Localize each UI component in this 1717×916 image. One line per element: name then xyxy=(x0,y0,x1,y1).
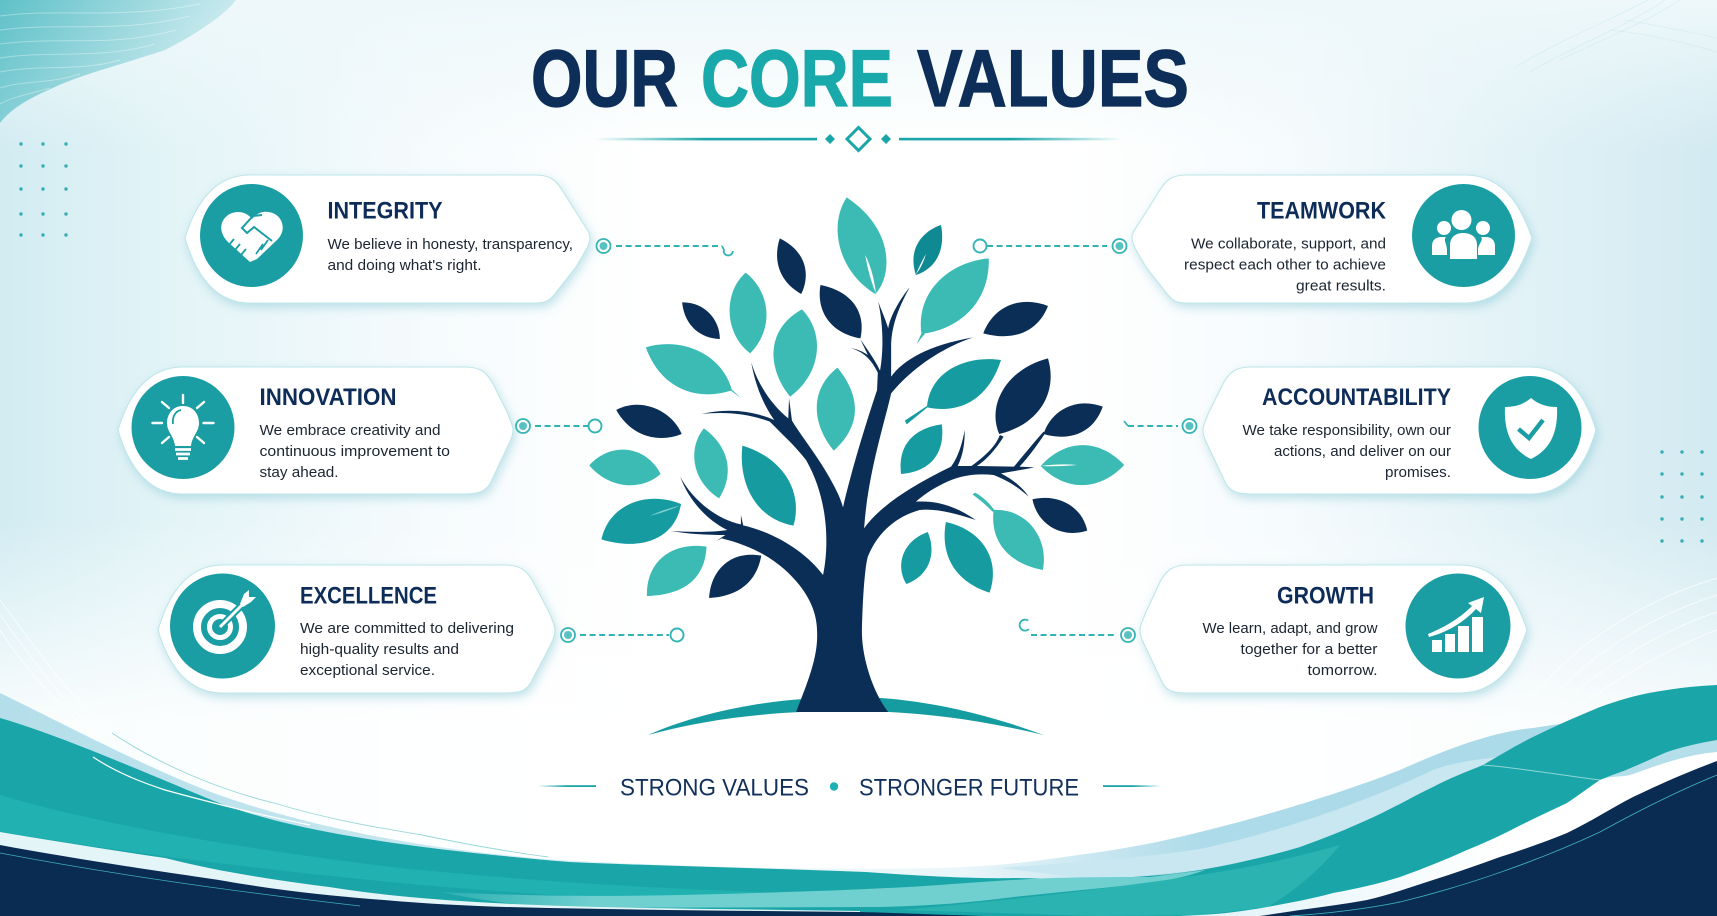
text: teamwork description: We collaborate, support, and xyxy=(1191,236,1386,252)
text: growth description: tomorrow. xyxy=(1308,662,1378,679)
panel: excellence xyxy=(158,565,555,693)
tagline xyxy=(538,774,1161,802)
tagline: STRONG VALUES xyxy=(620,774,809,802)
heading: excellence: EXCELLENCE xyxy=(300,582,437,610)
text: innovation description: We embrace creativity and xyxy=(260,422,440,439)
decorative dots: left xyxy=(19,142,68,237)
icon: shield with check xyxy=(1505,398,1557,459)
title: OUR xyxy=(531,34,678,124)
text: integrity description xyxy=(328,236,573,274)
icon: team of three people xyxy=(1432,210,1495,259)
heading: accountability: ACCOUNTABILITY xyxy=(1262,384,1451,411)
text: teamwork description: respect each other to achieve xyxy=(1184,256,1386,274)
heading: innovation: INNOVATION xyxy=(260,384,396,411)
tree trunk and branches xyxy=(671,287,1045,712)
heading: growth: GROWTH xyxy=(1277,582,1374,610)
text: excellence description: We are committed to delivering xyxy=(300,620,514,637)
icon: light bulb xyxy=(152,395,214,458)
title divider xyxy=(595,128,1122,150)
text: integrity description: We believe in honesty, transparency, xyxy=(328,236,573,253)
text: accountability description: promises. xyxy=(1385,464,1451,481)
icon: target with arrow xyxy=(197,590,256,650)
bottom waves xyxy=(0,685,1717,916)
panel: integrity xyxy=(185,175,590,303)
ground arc xyxy=(648,698,1044,735)
text: excellence description: high-quality results and xyxy=(300,641,459,658)
text: growth description xyxy=(1202,620,1378,679)
connector: teamwork xyxy=(974,239,1126,253)
connector: excellence xyxy=(561,628,684,642)
decorative dots: right xyxy=(1660,450,1704,543)
title: VALUES xyxy=(917,34,1189,124)
connector: growth xyxy=(1017,618,1135,642)
panel: growth xyxy=(1140,565,1527,693)
text: innovation description: stay ahead. xyxy=(260,464,338,481)
text: innovation description xyxy=(260,422,450,481)
heading: integrity: INTEGRITY xyxy=(328,198,442,224)
text: excellence description xyxy=(300,620,514,679)
text: growth description: together for a better xyxy=(1240,641,1378,658)
text: accountability description: We take responsibility, own our xyxy=(1242,422,1451,439)
text: accountability description: actions, and deliver on our xyxy=(1274,443,1451,460)
connector: integrity xyxy=(596,239,733,255)
text: innovation description: continuous improvement to xyxy=(260,443,450,460)
connector: innovation xyxy=(516,419,602,433)
panel: teamwork xyxy=(1132,175,1532,303)
title xyxy=(531,34,1189,124)
connector: accountability xyxy=(1124,419,1196,433)
text: teamwork description xyxy=(1184,236,1386,294)
text: growth description: We learn, adapt, and grow xyxy=(1202,620,1378,637)
panel: accountability xyxy=(1203,367,1596,494)
text: excellence description: exceptional service. xyxy=(300,662,435,679)
text: teamwork description: great results. xyxy=(1296,278,1386,294)
heading: teamwork: TEAMWORK xyxy=(1257,198,1386,224)
panel: innovation xyxy=(118,367,513,494)
tagline: STRONGER FUTURE xyxy=(859,774,1079,802)
icon: rising bar chart xyxy=(1428,597,1484,652)
text: integrity description: and doing what's right. xyxy=(328,257,482,274)
title: CORE xyxy=(701,34,893,124)
icon: heart handshake xyxy=(221,212,283,262)
text: accountability description xyxy=(1242,422,1451,481)
tree illustration xyxy=(589,197,1124,712)
leaves xyxy=(589,197,1124,598)
